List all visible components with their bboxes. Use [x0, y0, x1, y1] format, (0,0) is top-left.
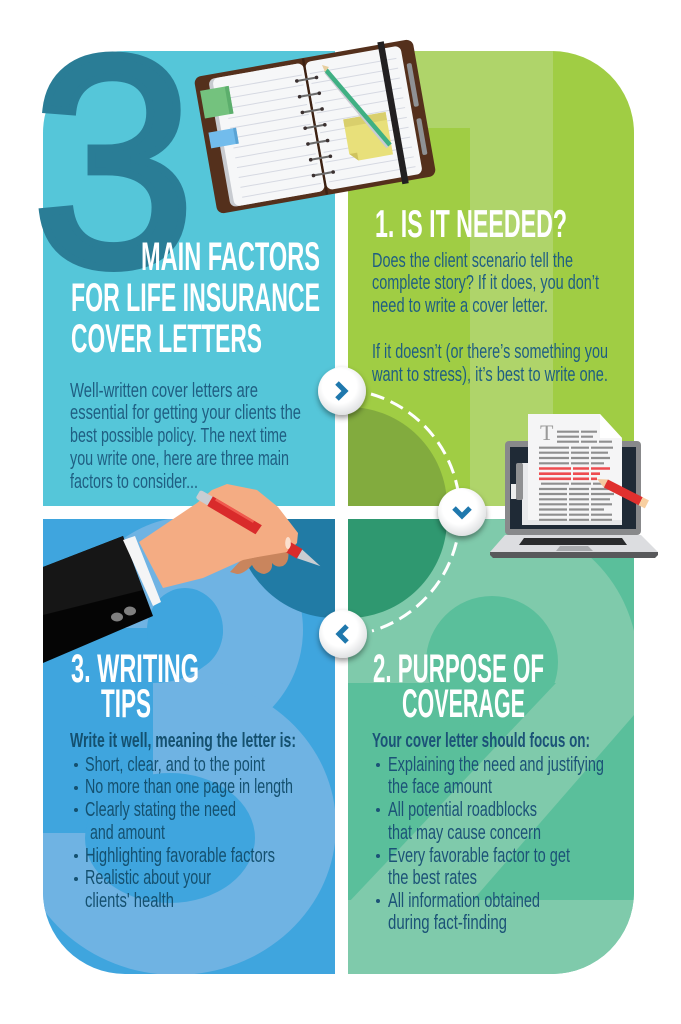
watermark shape: layered bowls [16, 517, 336, 975]
sticky note: blue [208, 128, 239, 148]
list: writing tips: Clearly stating the need [85, 798, 236, 821]
icon: laptop with document [490, 414, 658, 558]
body text 1 [371, 249, 608, 386]
list: writing tips: Realistic about your [85, 866, 211, 889]
body text 1: need to write a cover letter. [372, 294, 548, 317]
elastic band [377, 41, 409, 184]
list: writing tips: Short, clear, and to the point [85, 753, 265, 776]
document text lines [539, 432, 614, 520]
list: cover letter focus: that may cause concern [388, 821, 541, 844]
list: writing tips: Highlighting favorable factors [85, 844, 275, 867]
introduction text: best possible policy. The next time [70, 424, 287, 447]
list: cover letter focus: All potential roadblocks [388, 798, 537, 821]
heading 2: COVERAGE [402, 682, 525, 726]
list: cover letter focus: Every favorable factor to get [388, 844, 570, 867]
button: chevron left [319, 610, 367, 658]
clips [406, 63, 428, 155]
rings [295, 75, 335, 178]
watermark shape: bowl, diagonal and base [346, 519, 638, 974]
lower fingers [230, 550, 288, 574]
document T: T [540, 420, 554, 445]
introduction text [70, 379, 301, 493]
pen [195, 489, 323, 571]
panel: 2. purpose of coverage [346, 519, 638, 974]
list: cover letter focus: the best rates [388, 866, 477, 889]
sticky note: green [200, 86, 233, 118]
introduction text: factors to consider... [70, 470, 198, 493]
list: cover letter focus: the face amount [388, 775, 492, 798]
icon: notebook [193, 36, 437, 217]
heading 3 [71, 647, 199, 726]
heading 3: TIPS [101, 682, 151, 726]
list: cover letter focus: during fact-finding [388, 911, 507, 934]
heading 2 [373, 647, 544, 726]
large numeral 3: 3 [32, 0, 195, 329]
panel: 1. is it needed [348, 51, 634, 506]
list: cover letter focus: All information obtained [388, 889, 540, 912]
title [71, 235, 320, 361]
hand [139, 484, 298, 588]
jacket sleeve [43, 536, 153, 663]
heading 3: 3. WRITING [71, 647, 199, 691]
sleeve buttons [111, 606, 136, 622]
icon: hand holding pen [43, 484, 323, 663]
body text 1: Does the client scenario tell the [372, 249, 573, 272]
panel: 3. writing tips [16, 517, 336, 975]
introduction text: you write one, here are three main [70, 447, 289, 470]
dark quarter circle [348, 407, 447, 506]
list: writing tips [70, 729, 296, 912]
title: MAIN FACTORS [141, 235, 320, 279]
dark quarter circle [348, 519, 447, 618]
button: chevron right [318, 367, 366, 415]
title: FOR LIFE INSURANCE [71, 276, 320, 320]
red pencil [595, 475, 649, 508]
shirt cuff [123, 536, 161, 606]
title: COVER LETTERS [71, 317, 262, 361]
highlighted lines [539, 468, 610, 479]
thumb and index finger [240, 525, 291, 560]
sticky note: yellow [343, 112, 393, 162]
heading 2: 2. PURPOSE OF [373, 647, 544, 691]
list: writing tips: Write it well, meaning the letter is: [70, 729, 296, 752]
dark quarter circle [236, 519, 335, 618]
watermark shape: stem and flag [400, 51, 553, 506]
icon: green pencil [322, 65, 390, 147]
introduction text: Well-written cover letters are [70, 379, 258, 402]
list: writing tips: clients' health [85, 889, 174, 912]
panel: introduction [32, 0, 335, 506]
dashed connector arc [371, 394, 460, 631]
list: cover letter focus [372, 729, 604, 934]
list: writing tips: No more than one page in length [85, 775, 293, 798]
button: chevron down [438, 488, 486, 536]
introduction text: essential for getting your clients the [70, 401, 301, 424]
list: writing tips: and amount [90, 821, 165, 844]
